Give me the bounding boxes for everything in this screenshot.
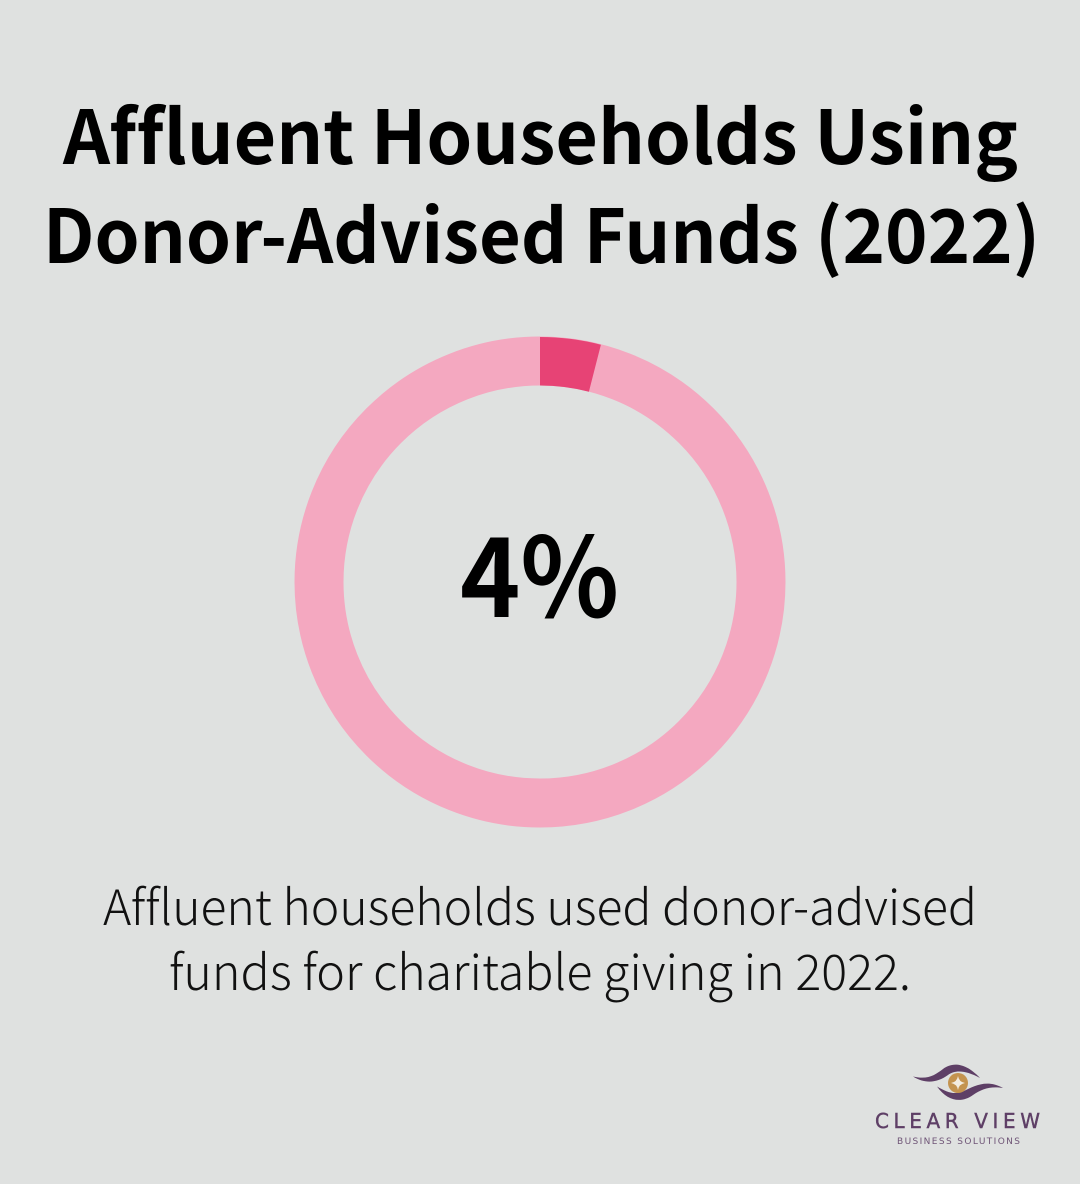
logo tagline: BUSINESS SOLUTIONS — [897, 1137, 1020, 1147]
donut highlighted segment — [540, 337, 601, 392]
description text — [103, 869, 977, 1005]
title: Donor-Advised Funds (2022) — [43, 178, 1040, 285]
title — [43, 79, 1040, 285]
donut chart: 4% — [319, 337, 761, 803]
description text: Affluent households used donor-advised — [103, 869, 977, 940]
logo: Clear View Business Solutions — [875, 1065, 1040, 1147]
donut value: 4% — [460, 489, 619, 649]
logo wordmark: CLEAR VIEW — [875, 1109, 1040, 1133]
title: Affluent Households Using — [62, 79, 1018, 186]
logo icon: eye — [913, 1065, 1003, 1100]
description text: funds for charitable giving in 2022. — [169, 934, 911, 1005]
donut track — [319, 361, 761, 803]
